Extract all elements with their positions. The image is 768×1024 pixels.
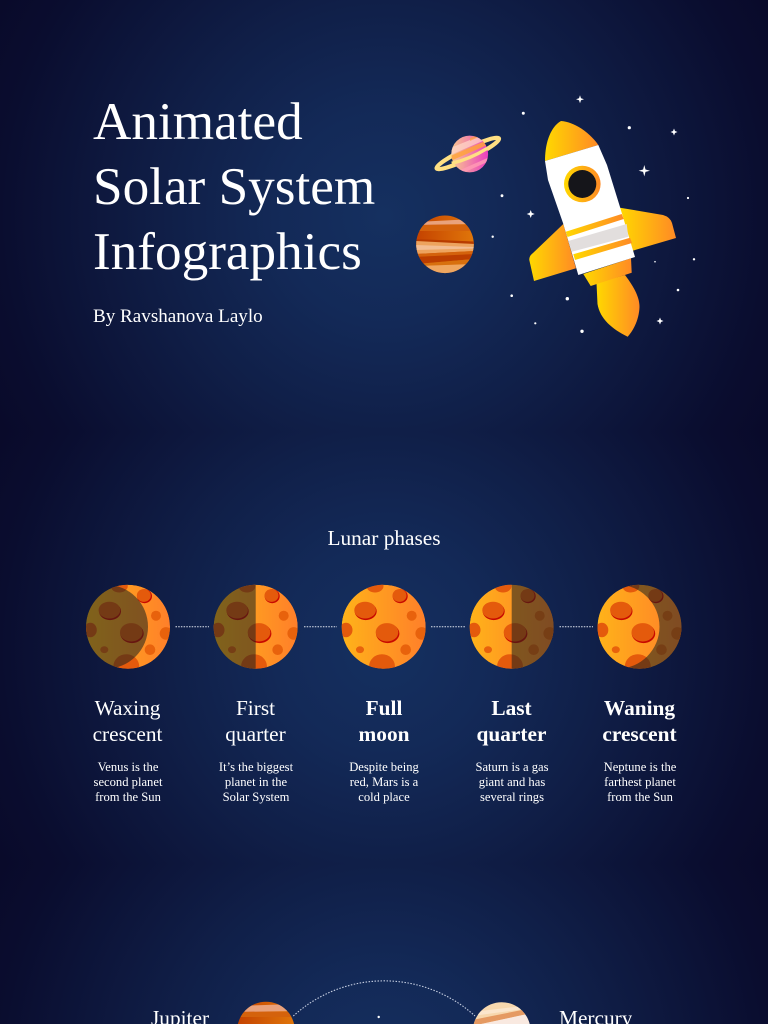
label: full moon: Full <box>366 696 402 720</box>
text: waning crescent: Neptune is the <box>604 760 676 774</box>
text: last quarter: Saturn is a gas <box>475 760 549 774</box>
text: last quarter: several rings <box>480 790 544 804</box>
subtitle: By Ravshanova Laylo <box>93 306 263 327</box>
text: first quarter <box>219 760 294 804</box>
title: Solar System <box>93 157 375 216</box>
moon: full moon <box>340 580 428 679</box>
text: last quarter: giant and has <box>479 775 545 789</box>
label: full moon <box>359 696 410 746</box>
label: last quarter <box>477 696 546 746</box>
orbit arc <box>293 981 475 1018</box>
label: waning crescent <box>602 696 677 746</box>
text: waxing crescent: Venus is the <box>98 760 158 774</box>
planet: Mercury bottom <box>472 1002 532 1024</box>
text: first quarter: It’s the biggest <box>219 760 293 774</box>
label: first quarter: First <box>236 696 275 720</box>
stars <box>492 95 695 333</box>
moon: last quarter <box>470 584 554 669</box>
label: waxing crescent: Waxing <box>95 696 160 720</box>
title: Infographics <box>93 222 362 281</box>
label: waxing crescent <box>93 696 162 746</box>
icon: rocket <box>529 121 676 337</box>
moon: waxing crescent <box>86 584 170 669</box>
text: waxing crescent: from the Sun <box>95 790 161 804</box>
text: first quarter: planet in the <box>225 775 287 789</box>
text: waxing crescent <box>94 760 162 804</box>
label: waning crescent: crescent <box>602 722 677 746</box>
text: waning crescent: from the Sun <box>607 790 673 804</box>
label: last quarter: Last <box>491 696 532 720</box>
label: full moon: moon <box>359 722 409 746</box>
text: full moon: red, Mars is a <box>350 775 418 789</box>
title: Animated <box>93 92 303 151</box>
label: first quarter: quarter <box>225 722 286 746</box>
planet: Jupiter bottom <box>236 1002 296 1024</box>
text: waxing crescent: second planet <box>94 775 162 789</box>
label: first quarter <box>225 696 286 746</box>
planet: Jupiter small <box>416 216 474 275</box>
label: last quarter: quarter <box>477 722 546 746</box>
moon: first quarter <box>214 584 298 669</box>
label: waxing crescent: crescent <box>93 722 162 746</box>
text: full moon: cold place <box>358 790 410 804</box>
heading: lunar phases: Lunar phases <box>327 526 441 550</box>
text: first quarter: Solar System <box>223 790 289 804</box>
text: full moon: Despite being <box>349 760 419 774</box>
connector lines <box>176 626 593 628</box>
planet: Saturn <box>434 136 502 172</box>
text: waning crescent <box>604 760 676 804</box>
text: last quarter <box>475 760 549 804</box>
label: waning crescent: Waning <box>604 696 675 720</box>
title <box>93 92 375 281</box>
text: full moon <box>349 760 419 804</box>
text: waning crescent: farthest planet <box>604 775 676 789</box>
moon: waning crescent <box>598 584 682 669</box>
